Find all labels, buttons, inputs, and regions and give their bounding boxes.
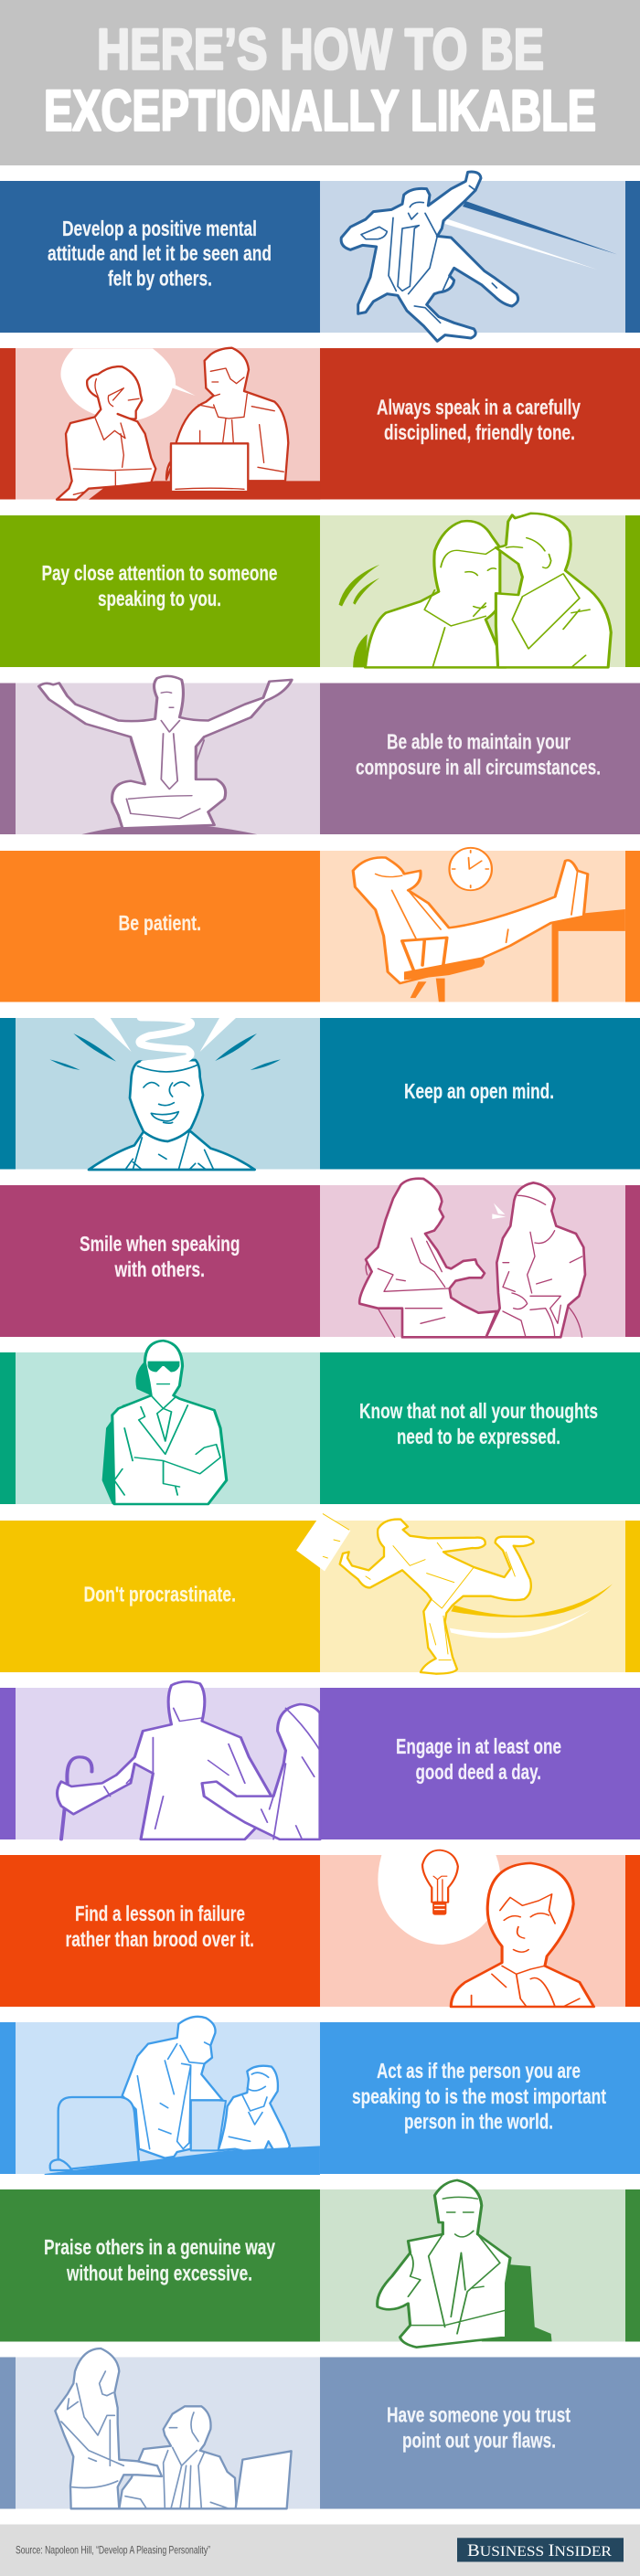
panel: row 1 positive attitude bbox=[0, 172, 640, 341]
text: row 2 bbox=[377, 395, 581, 444]
text: row 3 bbox=[42, 561, 278, 610]
icon: two women talking bbox=[359, 1179, 585, 1337]
text: row 11 bbox=[66, 1902, 254, 1951]
icon: meditating man bbox=[38, 676, 292, 834]
text: row 7: with others. bbox=[114, 1257, 205, 1281]
text: row 14: point out your flaws. bbox=[402, 2429, 556, 2453]
source credit: Source: Napoleon Hill, “Develop A Pleasing Personality” bbox=[16, 2544, 210, 2557]
panel: row 3 pay attention bbox=[0, 514, 640, 667]
icon: relaxing man with clock and desk bbox=[353, 848, 625, 1002]
text: row 11: rather than brood over it. bbox=[66, 1927, 254, 1951]
icon: man giving thumbs up bbox=[378, 2180, 552, 2348]
panel: row 9 don't procrastinate bbox=[0, 1512, 640, 1674]
panel: row 12 important person bbox=[0, 2017, 640, 2175]
logo: Business Insider bbox=[457, 2538, 624, 2562]
text: row 13 bbox=[44, 2235, 275, 2284]
panel: row 11 lesson in failure bbox=[0, 1850, 640, 2007]
panel: row 7 smile bbox=[0, 1179, 640, 1337]
logo: Business Insider: BUSINESS INSIDER bbox=[467, 2541, 612, 2560]
text: row 8 bbox=[359, 1399, 598, 1448]
icon: jumping man bbox=[341, 172, 617, 341]
text: row 1 bbox=[48, 217, 272, 291]
text: row 1: Develop a positive mental bbox=[62, 217, 257, 240]
text: row 10 bbox=[396, 1734, 561, 1784]
text: row 7 bbox=[80, 1232, 240, 1281]
icon: man in sunglasses bbox=[102, 1341, 227, 1504]
text: row 4: Be able to maintain your bbox=[387, 730, 571, 754]
icon: thinking person with lightbulb bbox=[378, 1850, 594, 2007]
icon: two colleagues talking bbox=[57, 348, 320, 500]
panel: row 8 thoughts bbox=[0, 1341, 640, 1504]
text: row 10: good deed a day. bbox=[415, 1760, 541, 1784]
text: row 11: Find a lesson in failure bbox=[75, 1902, 245, 1925]
text: row 9: Don't procrastinate. bbox=[84, 1583, 236, 1606]
text: row 13: Praise others in a genuine way bbox=[44, 2235, 275, 2259]
title banner bbox=[0, 0, 640, 165]
icon: woman advising seated man bbox=[55, 2348, 292, 2508]
text: row 8: need to be expressed. bbox=[397, 1425, 560, 1448]
text: row 7: Smile when speaking bbox=[80, 1232, 240, 1256]
icon: man leaning over woman at table bbox=[45, 2017, 320, 2175]
footer band bbox=[0, 2524, 640, 2576]
panel: row 10 good deed bbox=[0, 1681, 640, 1839]
icon: man whispering to another bbox=[339, 514, 611, 667]
text: row 3: Pay close attention to someone bbox=[42, 561, 278, 585]
text: row 12 bbox=[352, 2059, 606, 2133]
panel: row 13 genuine praise bbox=[0, 2180, 640, 2348]
icon: man with open head bbox=[49, 1017, 281, 1170]
panel: row 5 be patient bbox=[0, 848, 640, 1002]
icon: running man with briefcase bbox=[296, 1512, 613, 1674]
panel: row 6 open mind bbox=[0, 1017, 640, 1170]
text: row 14: Have someone you trust bbox=[387, 2403, 571, 2427]
panel: row 14 trusted critic bbox=[0, 2348, 640, 2509]
text: row 4 bbox=[356, 730, 601, 779]
icon: helping an old man with cane bbox=[57, 1681, 320, 1839]
text: row 6: Keep an open mind. bbox=[404, 1079, 554, 1103]
text: row 5: Be patient. bbox=[119, 911, 201, 935]
panel: row 4 composure bbox=[0, 676, 640, 834]
text: row 2: disciplined, friendly tone. bbox=[384, 420, 575, 444]
text: row 14 bbox=[387, 2403, 571, 2453]
text: row 1: attitude and let it be seen and bbox=[48, 241, 272, 265]
panel: row 2 friendly tone bbox=[0, 348, 640, 500]
text: row 13: without being excessive. bbox=[66, 2261, 252, 2284]
text: row 12: person in the world. bbox=[404, 2109, 553, 2133]
text: row 10: Engage in at least one bbox=[396, 1734, 561, 1758]
text: row 1: felt by others. bbox=[108, 267, 212, 291]
text: row 3: speaking to you. bbox=[98, 587, 221, 610]
